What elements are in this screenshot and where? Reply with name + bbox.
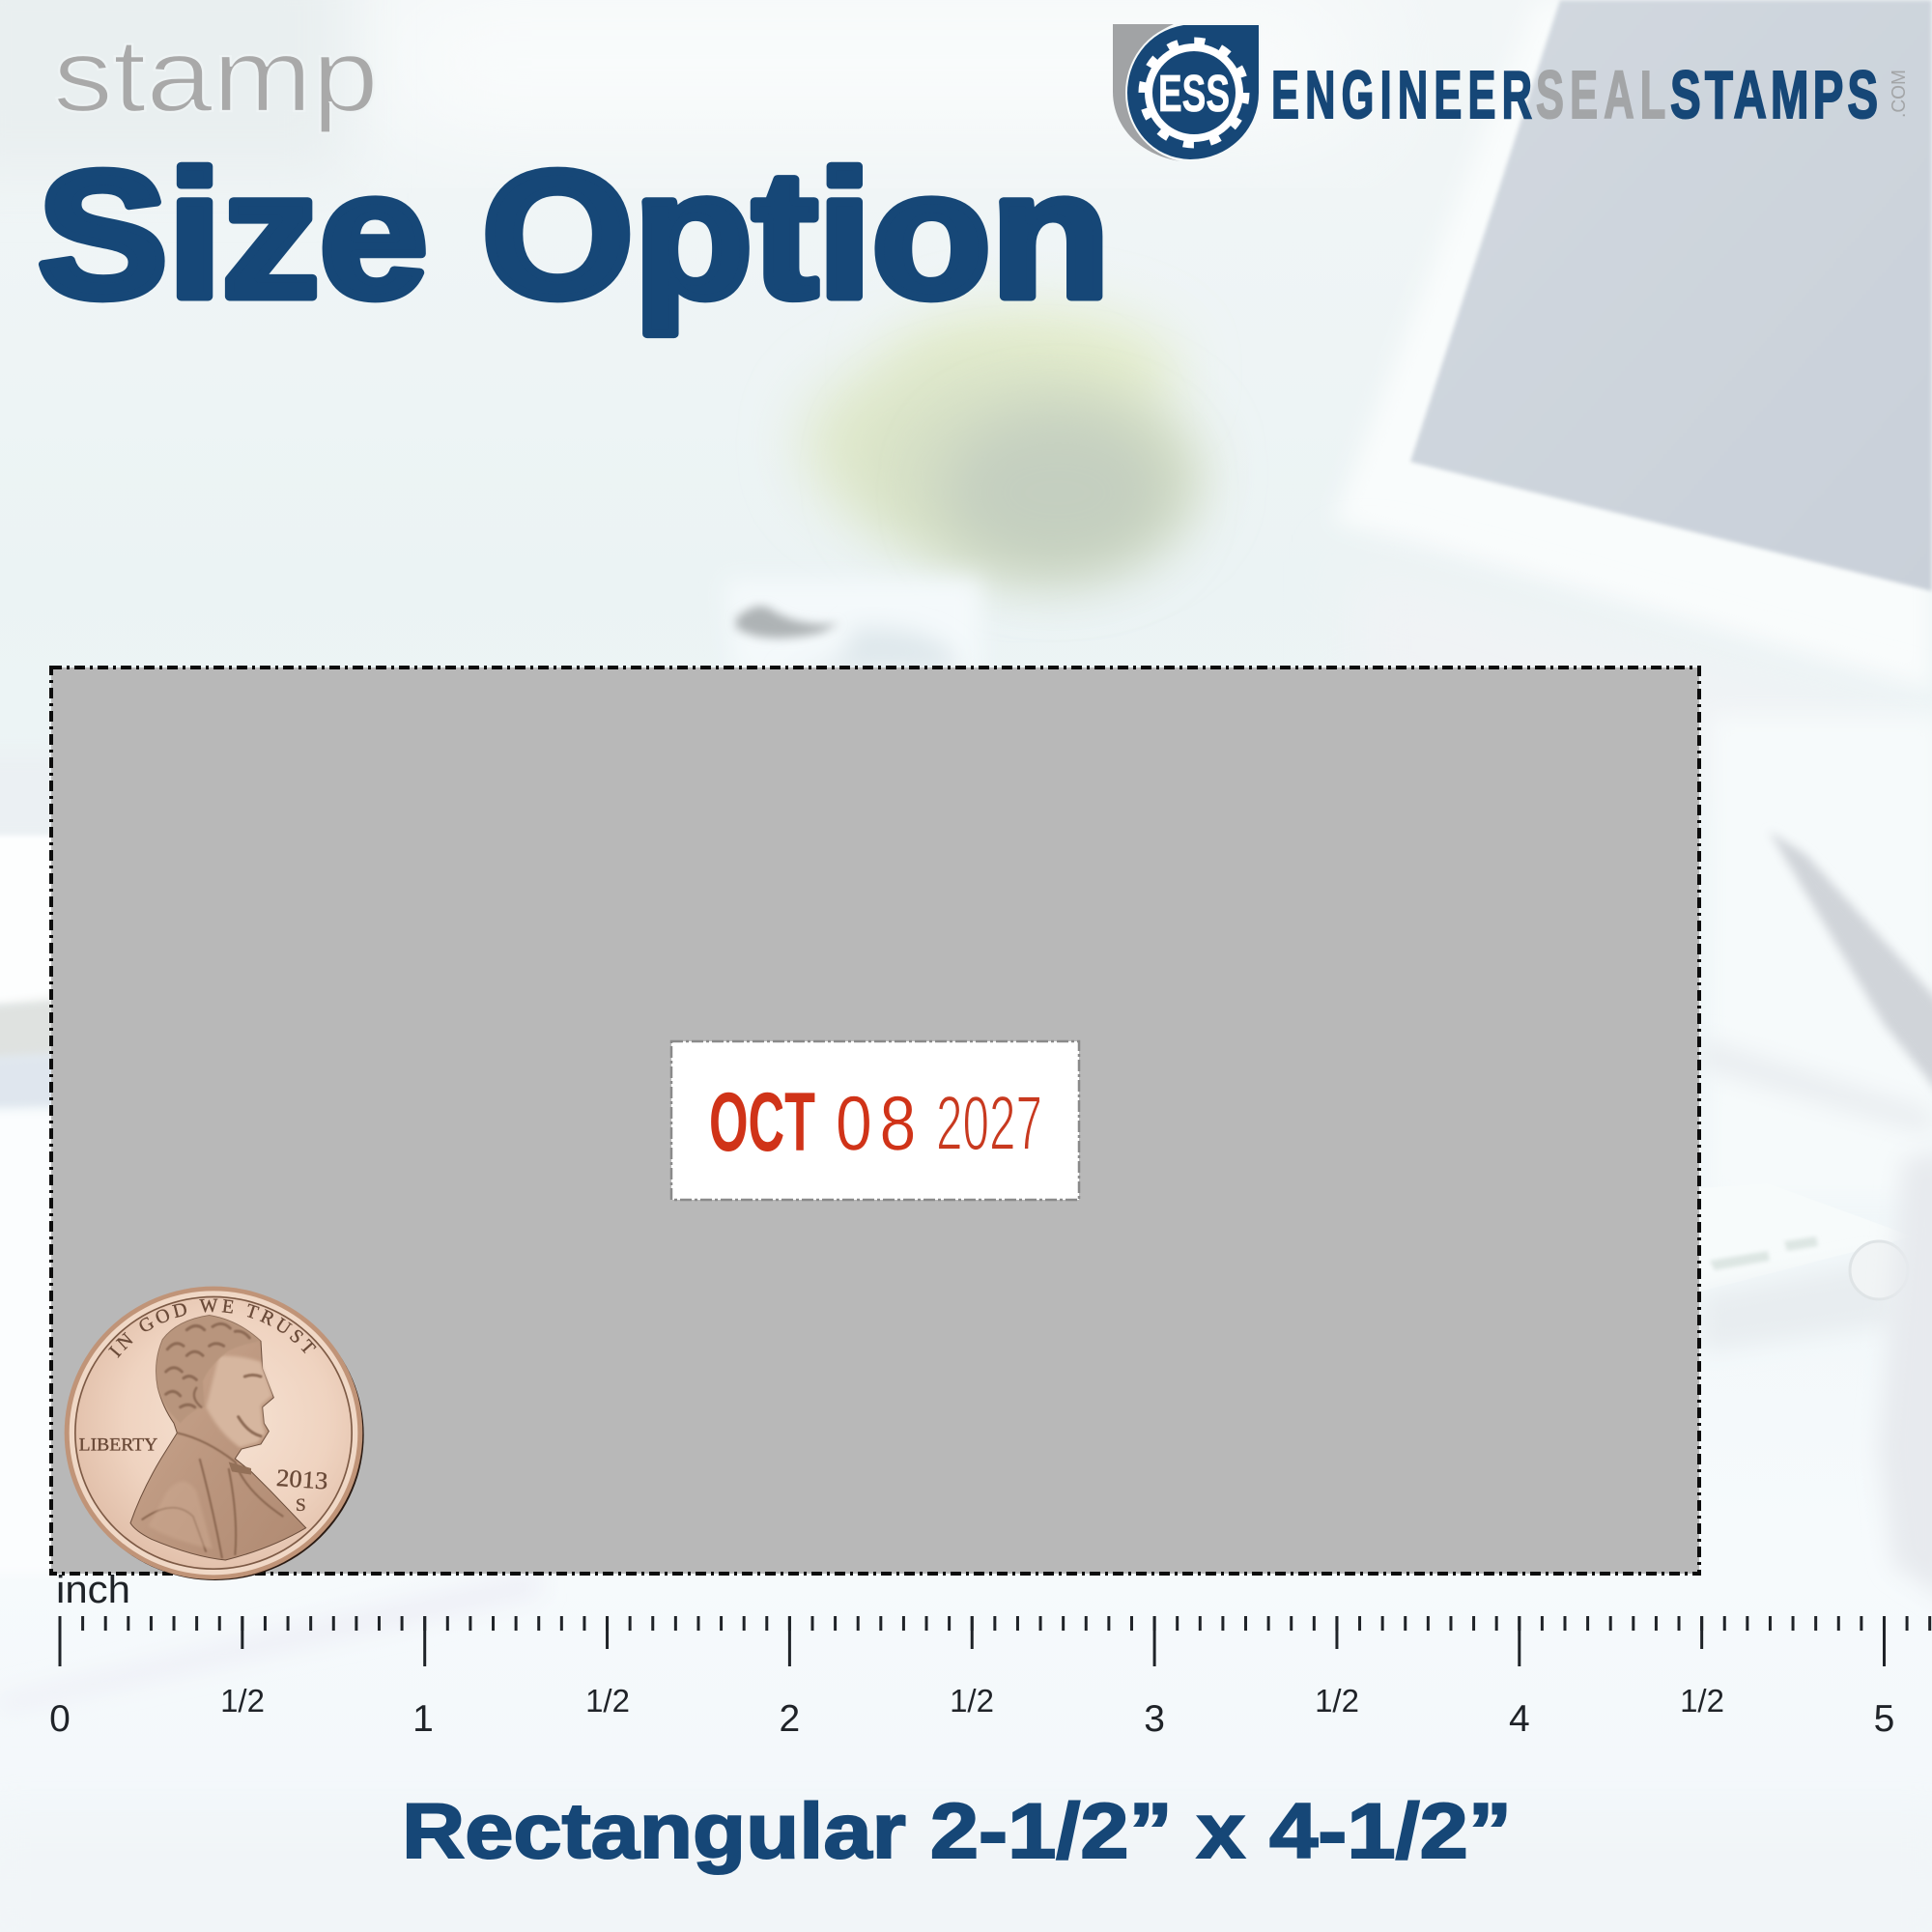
panel: gray stamp size area bbox=[51, 668, 1699, 1574]
small label: stamp: stamp bbox=[53, 16, 379, 133]
ruler: inch ticks bbox=[60, 1616, 1884, 1666]
ruler bbox=[58, 1616, 1932, 1666]
ruler labels: whole inches: 5 bbox=[1874, 1698, 1894, 1740]
ruler: half inch ticks bbox=[242, 1616, 1702, 1649]
ruler labels: half inches: 1/2 bbox=[220, 1683, 265, 1719]
ruler labels: half inches: 1/2 bbox=[585, 1683, 630, 1719]
logo: Engineer Seal Stamps bbox=[1113, 24, 1910, 161]
ruler labels: whole inches: 1 bbox=[412, 1698, 434, 1740]
coin text: S: S bbox=[296, 1495, 306, 1516]
ruler labels: half inches: 1/2 bbox=[1315, 1683, 1359, 1719]
caption: stamp dimensions: Rectangular 2-1/2” x 4-1/2” bbox=[402, 1788, 1512, 1875]
ruler labels: half inches: 1/2 bbox=[1680, 1683, 1724, 1719]
coin text: 2013: 2013 bbox=[275, 1464, 328, 1495]
stamp text: 2027: 2027 bbox=[936, 1080, 1042, 1166]
icon: shield with gear: ESS bbox=[1158, 65, 1230, 123]
stamp text: OCT: OCT bbox=[709, 1076, 815, 1169]
ruler labels: whole inches: 3 bbox=[1144, 1698, 1165, 1740]
coin text: IN GOD WE TRUST: IN GOD WE TRUST bbox=[108, 1298, 317, 1358]
ruler labels: half inches: 1/2 bbox=[950, 1683, 994, 1719]
ruler labels: whole inches: 4 bbox=[1509, 1698, 1530, 1740]
ruler: sixteenth ticks bbox=[58, 1616, 1932, 1631]
ruler labels: whole inches: 2 bbox=[780, 1698, 800, 1740]
icon: penny coin bbox=[64, 1287, 364, 1580]
coin text: LIBERTY: LIBERTY bbox=[79, 1435, 157, 1455]
icon: Lincoln bust bbox=[130, 1316, 306, 1560]
logo word: ENGINEER: ENGINEER bbox=[1271, 57, 1538, 133]
ruler labels: half inches bbox=[220, 1683, 1724, 1719]
ruler labels: whole inches: 0 bbox=[49, 1698, 71, 1740]
icon: shield with gear bbox=[1113, 24, 1260, 161]
logo word: .COM: .COM bbox=[1889, 70, 1910, 118]
logo word: STAMPS: STAMPS bbox=[1670, 57, 1882, 132]
panel: stamp impression bbox=[671, 1041, 1079, 1200]
ruler labels: whole inches bbox=[49, 1698, 1894, 1740]
plant bbox=[889, 309, 1179, 435]
title: Size Option: Size Option bbox=[38, 135, 1110, 335]
logo word: SEAL: SEAL bbox=[1536, 57, 1672, 133]
stamp text: 08: 08 bbox=[836, 1080, 923, 1166]
unit label: inch: inch bbox=[56, 1569, 130, 1611]
